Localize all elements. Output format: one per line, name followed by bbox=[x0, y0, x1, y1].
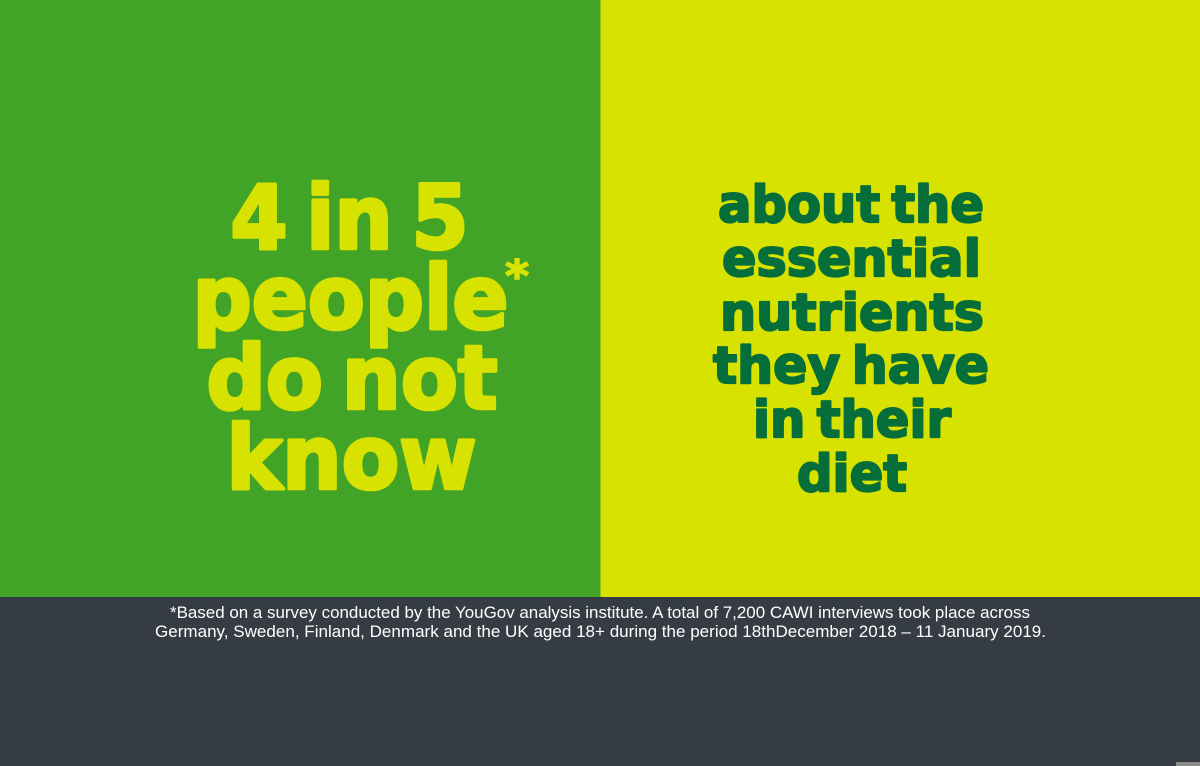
heading: about the essential nutrients they have in their diet: nutrients bbox=[720, 284, 984, 343]
heading: about the essential nutrients they have in their diet: essential bbox=[722, 230, 981, 289]
heading: 4 in 5 people do not know: know bbox=[226, 406, 476, 510]
heading: about the essential nutrients they have in their diet: they have bbox=[713, 337, 989, 396]
heading: about the essential nutrients they have in their diet: diet bbox=[797, 445, 907, 504]
footnote text bbox=[155, 603, 1046, 641]
heading: 4 in 5 people do not know: people bbox=[192, 246, 508, 350]
heading: 4 in 5 people do not know: do not bbox=[206, 326, 498, 430]
heading: about the essential nutrients they have in their diet bbox=[713, 176, 989, 504]
panel: yellow right bbox=[600, 0, 1200, 597]
corner grey tab bbox=[1176, 762, 1200, 766]
panel: green left bbox=[0, 0, 600, 597]
heading: 4 in 5 people do not know bbox=[192, 166, 508, 510]
heading: about the essential nutrients they have in their diet: in their bbox=[753, 391, 951, 450]
asterisk: * bbox=[505, 251, 529, 302]
footnote text: Germany, Sweden, Finland, Denmark and the UK aged 18+ during the period 18thDecember 2018 – 11 January 2019. bbox=[155, 622, 1046, 641]
heading: about the essential nutrients they have in their diet: about the bbox=[718, 176, 984, 235]
panel: dark footer bbox=[0, 597, 1200, 766]
footnote text: *Based on a survey conducted by the YouGov analysis institute. A total of 7,200 CAWI interviews took place across bbox=[170, 603, 1030, 622]
heading: 4 in 5 people do not know: 4 in 5 bbox=[230, 166, 468, 270]
